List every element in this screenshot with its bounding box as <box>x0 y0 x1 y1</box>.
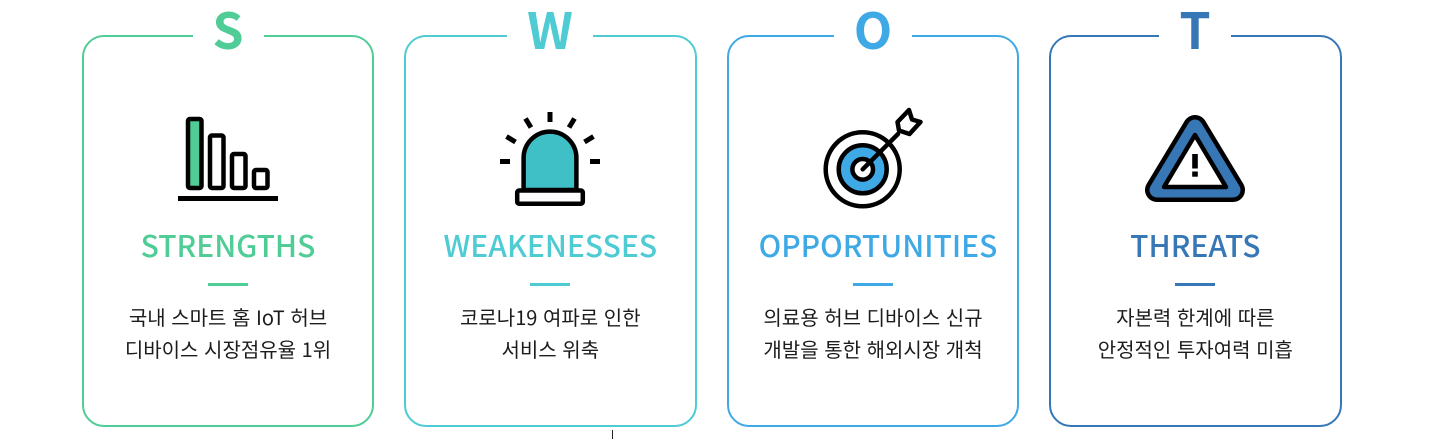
panel: weaknesses <box>404 35 697 427</box>
panel: opportunities <box>727 35 1019 427</box>
title: strengths: STRENGTHS <box>141 222 315 266</box>
icon: bar chart <box>178 116 278 201</box>
divider <box>1175 283 1215 286</box>
icon: target with arrow <box>823 108 923 208</box>
title: threats: THREATS <box>1130 222 1260 266</box>
heading letter O <box>834 0 912 60</box>
description: 서비스 위축 <box>502 334 599 362</box>
description: 국내 스마트 홈 IoT 허브 <box>129 302 327 330</box>
heading letter T <box>1159 0 1231 60</box>
description: 의료용 허브 디바이스 신규 <box>763 302 983 330</box>
divider <box>853 283 893 286</box>
description <box>1098 302 1293 362</box>
description: 디바이스 시장점유율 1위 <box>125 334 331 362</box>
title: opportunities: OPPORTUNITIES <box>759 222 997 266</box>
description: 안정적인 투자여력 미흡 <box>1098 334 1293 362</box>
icon: siren <box>500 112 600 206</box>
panel: strengths <box>82 35 374 427</box>
divider <box>530 283 570 286</box>
description: 자본력 한계에 따른 <box>1116 302 1275 330</box>
title: weaknesses: WEAKENESSES <box>443 222 657 266</box>
description: 개발을 통한 해외시장 개척 <box>763 334 983 362</box>
description <box>125 302 331 362</box>
description <box>460 302 641 362</box>
heading letter W <box>507 0 593 60</box>
description: 코로나19 여파로 인한 <box>460 302 641 330</box>
description <box>763 302 983 362</box>
divider <box>208 283 248 286</box>
icon: warning triangle <box>1145 115 1245 202</box>
heading letter S <box>192 0 264 60</box>
small tick mark <box>612 430 613 439</box>
panel: threats <box>1049 35 1342 427</box>
